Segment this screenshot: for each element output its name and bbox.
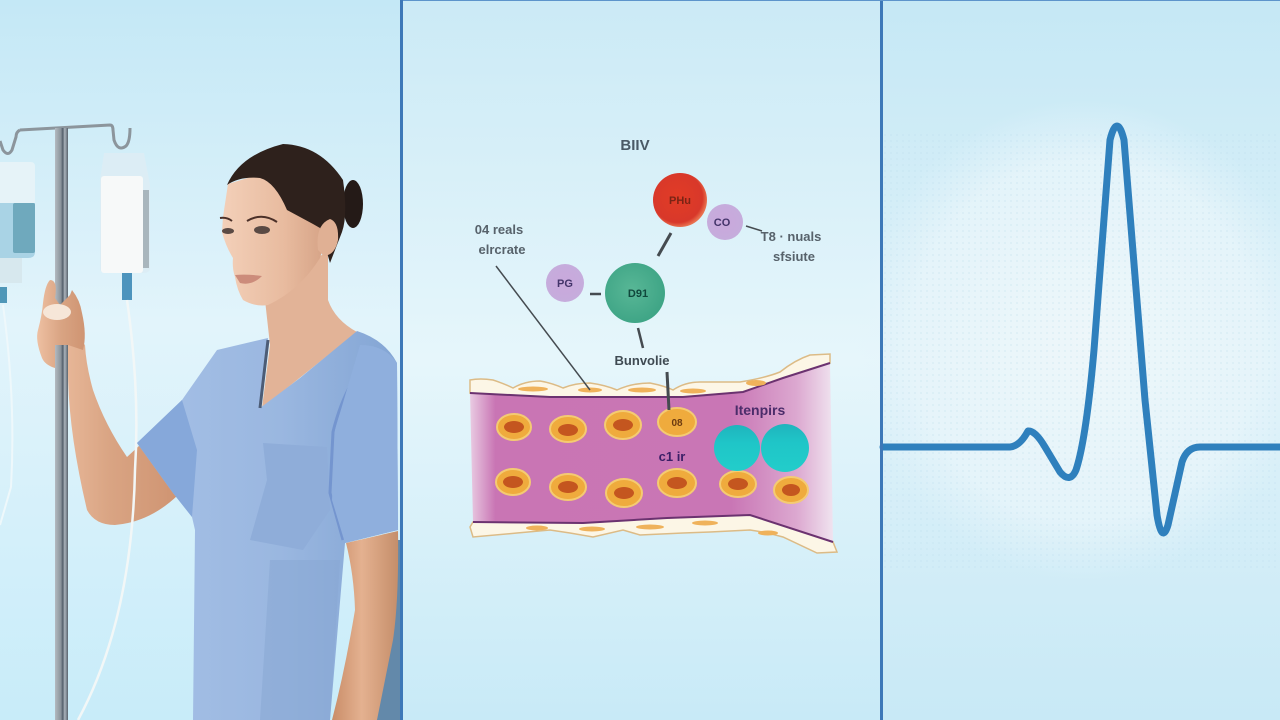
hair bun [343, 180, 363, 228]
diagram heading: BIIV [620, 137, 650, 154]
small lilac cell, left [546, 264, 584, 302]
icon: left IV bag with fluid [0, 162, 35, 525]
chest pocket [250, 443, 330, 550]
ECG line [883, 126, 1280, 533]
icon: IV pole [0, 125, 130, 720]
teal cells [714, 424, 809, 472]
dark backdrop behind right arm [370, 540, 401, 720]
blood vessel: 08 [671, 418, 683, 429]
orange cells [496, 408, 808, 507]
blood vessel: c1 ir [659, 449, 685, 464]
nurse figure [137, 144, 398, 720]
left label [475, 222, 525, 257]
red cell [653, 173, 707, 227]
eyes, brows, mouth [220, 217, 277, 222]
upper wall [470, 354, 830, 397]
lower wall [470, 515, 837, 553]
center label: Bunvolie [615, 353, 669, 368]
panel: nurse with IV stand [0, 0, 401, 720]
wall nuclei [518, 380, 778, 536]
ear [318, 219, 338, 256]
scrub bottom shading [260, 560, 340, 720]
neck [262, 250, 357, 408]
icon: right IV bag [100, 153, 150, 300]
IV tube in front of arm [78, 300, 136, 720]
green cell: D91 [628, 288, 648, 300]
right label [761, 229, 821, 264]
small lilac cell, upper: CO [714, 217, 731, 229]
right label: T8 · nuals [761, 229, 821, 244]
red cell: PHu [669, 195, 691, 207]
sleeve left [137, 400, 197, 517]
sleeve seam right [330, 370, 360, 540]
forearm right [332, 531, 398, 720]
hair [227, 144, 345, 263]
right label: sfsiute [773, 249, 815, 264]
dotted grid background [855, 100, 1280, 580]
bandage on hand [43, 304, 71, 320]
small lilac cell, upper [707, 204, 743, 240]
hand gripping pole [37, 280, 85, 368]
panel dividers [400, 0, 1280, 720]
scrub neckline [260, 340, 268, 408]
green cell [605, 263, 665, 323]
pointer lines and arrows [496, 226, 762, 410]
panel: ECG trace [855, 0, 1280, 720]
vessel labels: Itenpirs [735, 402, 785, 418]
blood vessel [470, 354, 837, 553]
scrub top [137, 331, 398, 720]
left label: elrcrate [479, 242, 525, 257]
left label: 04 reals [475, 222, 523, 237]
small lilac cell, left: PG [557, 278, 573, 290]
face [222, 165, 335, 305]
panel: cell and vessel diagram [401, 0, 882, 720]
sleeve right [332, 345, 398, 543]
nurse forearm behind pole [43, 330, 178, 525]
